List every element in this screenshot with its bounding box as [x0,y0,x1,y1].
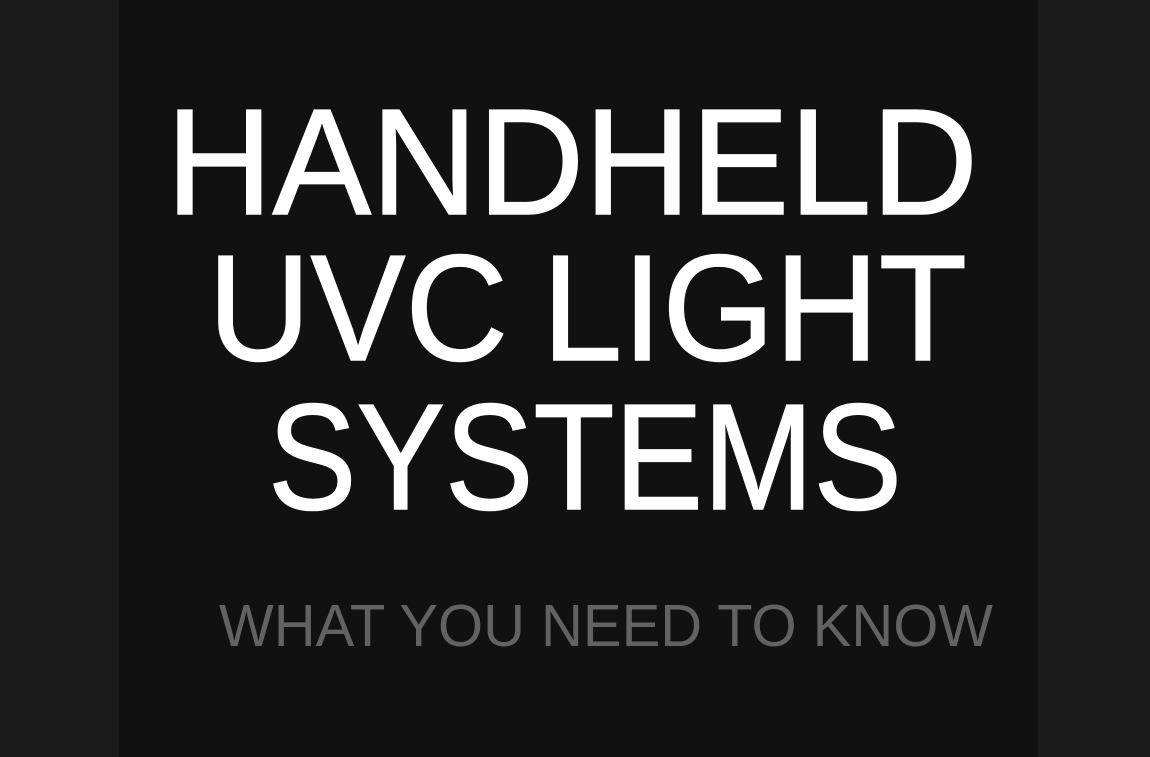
subtitle: WHAT YOU NEED TO KNOW [219,593,993,659]
title: SYSTEMS [268,372,902,541]
title: LIGHT [542,223,967,392]
title: UVC [208,223,508,392]
title [166,77,978,541]
title: HANDHELD [166,77,978,246]
panel: central dark column [119,0,1038,757]
